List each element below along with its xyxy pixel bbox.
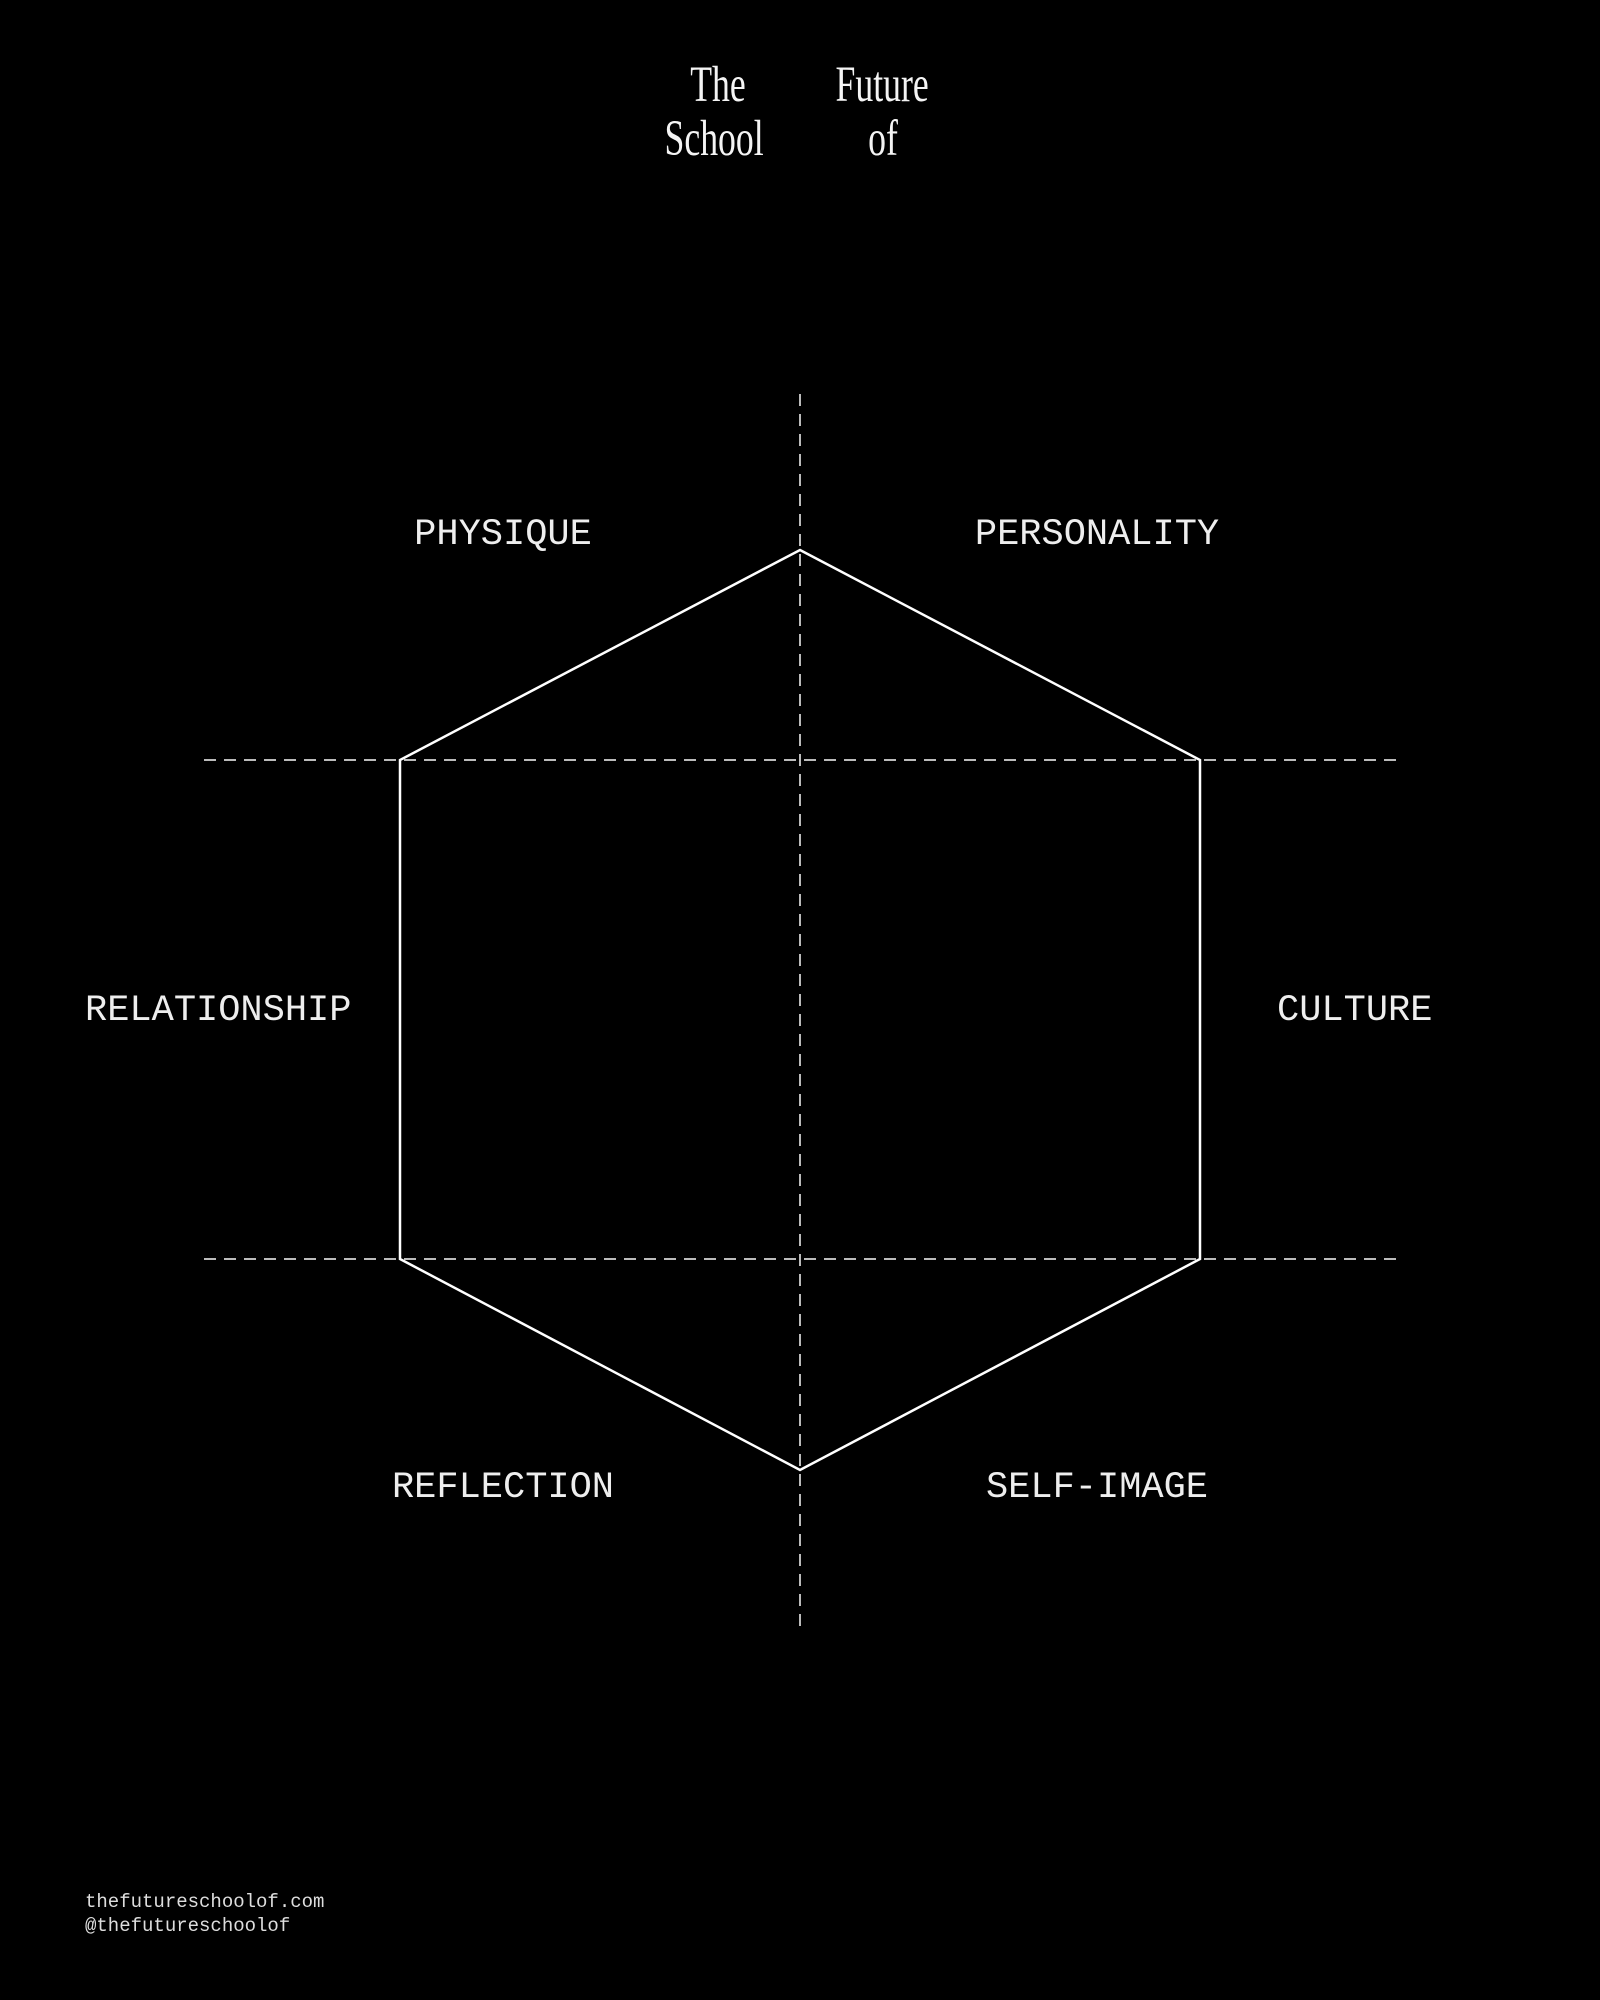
footer bbox=[85, 1891, 324, 1937]
label: personality: PERSONALITY bbox=[975, 514, 1219, 556]
label: culture: CULTURE bbox=[1277, 990, 1432, 1032]
title: Future bbox=[836, 57, 929, 113]
label: reflection: REFLECTION bbox=[392, 1467, 614, 1509]
title bbox=[664, 57, 929, 167]
footer: thefutureschoolof.com bbox=[85, 1891, 324, 1913]
title: of bbox=[868, 111, 898, 167]
title: The bbox=[690, 57, 746, 113]
hexagon bbox=[400, 550, 1200, 1470]
label: relationship: RELATIONSHIP bbox=[85, 990, 351, 1032]
label: self-image: SELF-IMAGE bbox=[986, 1467, 1208, 1509]
footer: @thefutureschoolof bbox=[85, 1915, 290, 1937]
label: physique: PHYSIQUE bbox=[414, 514, 592, 556]
title: School bbox=[664, 111, 764, 167]
